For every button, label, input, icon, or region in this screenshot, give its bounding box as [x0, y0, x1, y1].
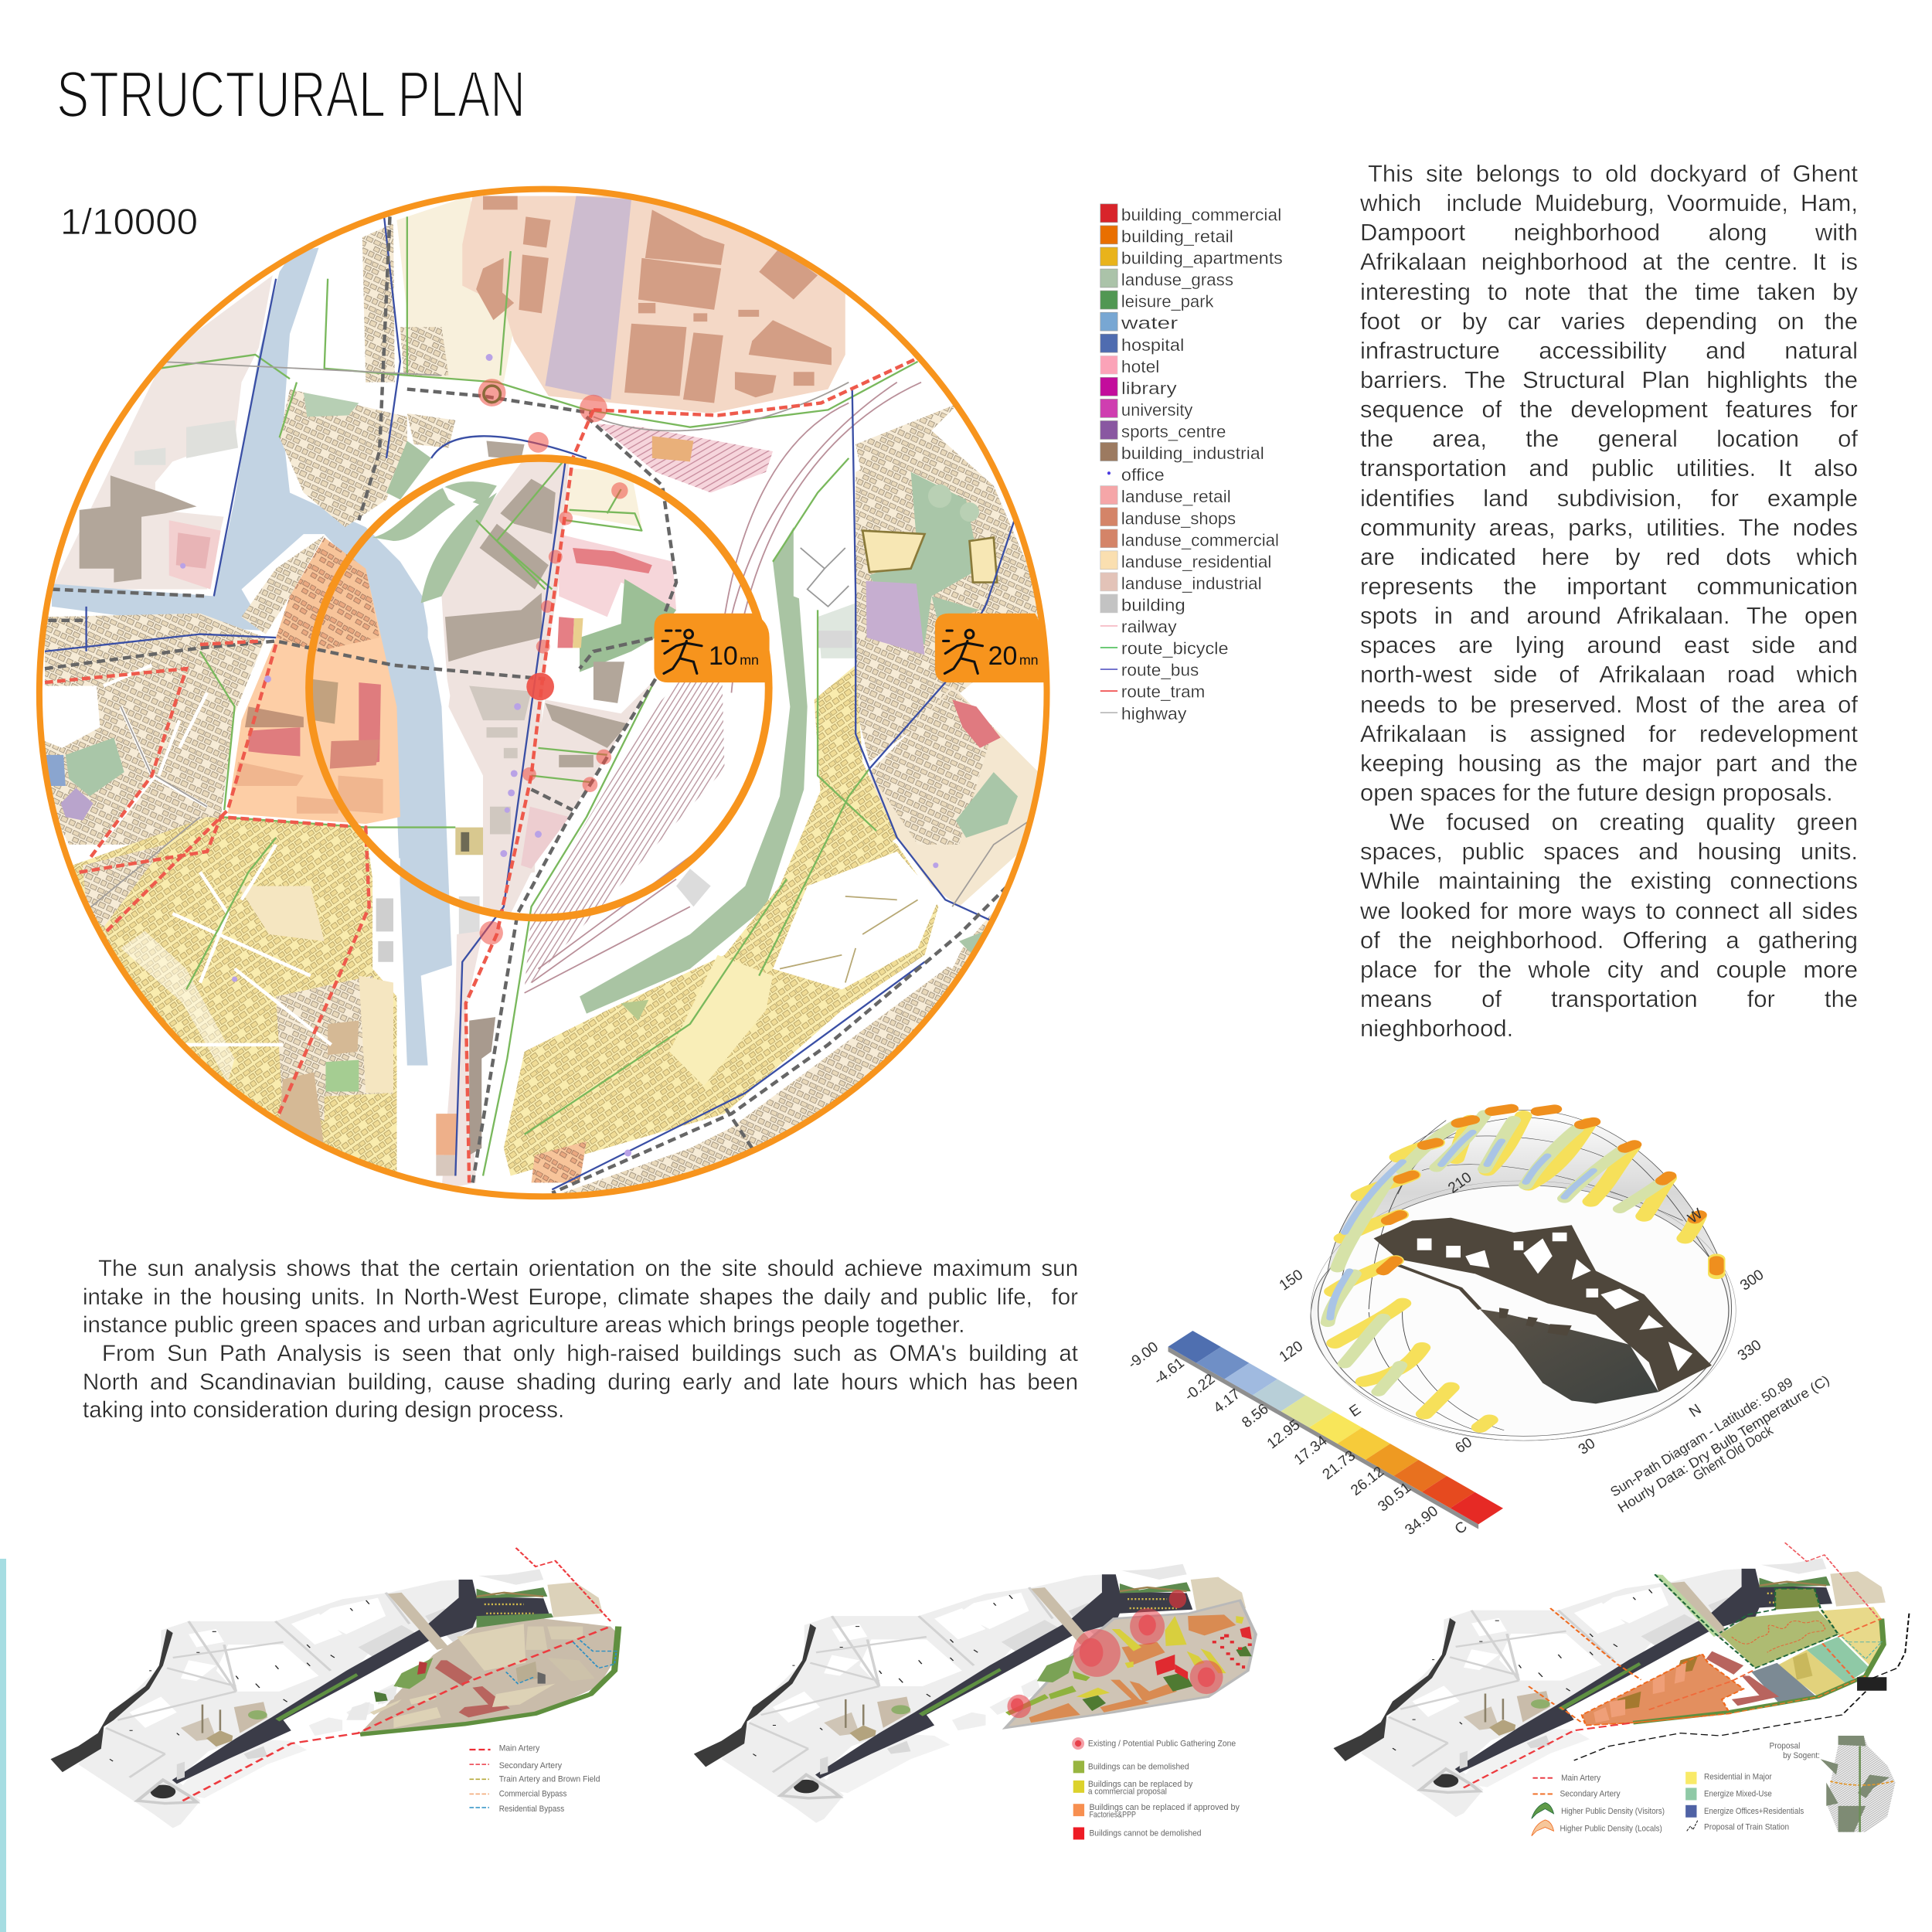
proposed train line	[1574, 1614, 1909, 1760]
legend: proposal	[1532, 1741, 1820, 1836]
map: thin route network	[45, 206, 1035, 1189]
chart caption: Ghent Old Dock	[1690, 1422, 1776, 1484]
legend: map layers: building_industrial	[1121, 444, 1264, 463]
text block: site description: Afrikalaan is assigned for redevelopment	[1360, 720, 1858, 747]
badge: 20 minutes: 20	[988, 641, 1017, 671]
legend: map layers: landuse_residential	[1121, 552, 1271, 571]
mixed-use land	[1807, 1637, 1869, 1684]
legend: proposal: Proposal of Train Station	[1704, 1823, 1789, 1832]
colour scale labels: 30.51	[1375, 1480, 1414, 1515]
text block: site description: We focused on creating quality green	[1389, 808, 1858, 835]
legend: proposal: Energize Offices+Residentials	[1704, 1807, 1804, 1816]
text block: site description: transportation and public utilities. It also	[1360, 454, 1858, 481]
chart: compass labels: 60	[1452, 1434, 1475, 1457]
text block: site description: This site belongs to old dockyard of Ghent	[1368, 160, 1858, 187]
text block: site description: place for the whole city and couple more	[1360, 956, 1858, 983]
map: 20 minute ring	[39, 189, 1047, 1196]
text block: sun analysis: North and Scandinavian building, cause shading during early and late hours which has been	[83, 1369, 1078, 1395]
text block: site description: community areas, parks, utilities. The nodes	[1360, 514, 1858, 541]
legend: map layers: landuse_grass	[1121, 270, 1233, 290]
map: office dots	[180, 354, 938, 1156]
legend: map layers: university	[1121, 400, 1193, 420]
legend: proposal: Proposal	[1770, 1741, 1800, 1750]
map: red communication nodes	[478, 379, 628, 944]
text block: site description: spaces are lying around east side and	[1360, 631, 1858, 658]
left edge strip	[0, 1559, 6, 1932]
text block: site description: the area, the general location of	[1360, 425, 1858, 452]
green site edge	[360, 1627, 618, 1734]
colour scale labels: 26.12	[1348, 1464, 1387, 1499]
text block: site description: are indicated here by red dots which	[1360, 543, 1858, 570]
map: canal water	[52, 248, 452, 1079]
chart caption: Hourly Data: Dry Bulb Temperature (C)	[1615, 1372, 1832, 1515]
legend: map layers	[1100, 204, 1283, 723]
map: 10 minute ring	[309, 458, 769, 918]
badge: 10 minutes: mn	[740, 652, 759, 668]
text block: site description: of the neighborhood. Offering a gathering	[1360, 927, 1858, 954]
colour scale labels: 34.90	[1402, 1503, 1441, 1539]
badge: 20 minutes	[935, 614, 1049, 682]
text block: site description: needs to be preserved. Most of the area of	[1360, 691, 1858, 718]
residential land, east	[1821, 1607, 1883, 1665]
chart: compass labels	[1277, 1169, 1767, 1458]
legend: proposal: by Sogent:	[1783, 1751, 1820, 1760]
text block: site description: interesting to note that the time taken by	[1360, 278, 1858, 305]
proposed train station	[1857, 1677, 1886, 1691]
offices land	[1751, 1663, 1817, 1703]
icon: running figure	[662, 630, 702, 673]
park	[1037, 1655, 1074, 1682]
legend: building policy: a commercial proposal	[1088, 1787, 1167, 1796]
text block: site description: identifies land subdivision, for example	[1360, 485, 1858, 512]
legend: building policy: Buildings cannot be demolished	[1089, 1829, 1202, 1838]
map: rail yard	[525, 383, 921, 993]
legend: proposal: Higher Public Density (Visitors)	[1561, 1807, 1665, 1816]
legend: map layers: building_retail	[1121, 226, 1233, 246]
text block: site description: While maintaining the existing connections	[1360, 867, 1858, 894]
orange replaceable buildings	[1029, 1614, 1236, 1723]
sun path analemma bands	[1328, 1108, 1716, 1427]
map: west orange commercial zone	[228, 538, 400, 824]
icon: running figure	[944, 630, 982, 673]
text block: site description: which include Muideburg, Voormuide, Ham,	[1360, 189, 1858, 216]
legend: map layers: office	[1121, 465, 1165, 485]
scale label: 1/10000	[60, 201, 198, 242]
legend: building policy: Buildings can be demolished	[1088, 1763, 1189, 1772]
panel: axonometric plan 3, development proposal	[1334, 1543, 1909, 1832]
chart: compass labels: 330	[1735, 1337, 1764, 1364]
legend: map layers: water	[1121, 314, 1179, 333]
badge: 10 minutes: 10	[709, 641, 738, 671]
map: central site land	[372, 441, 676, 944]
legend: map layers: building_commercial	[1121, 205, 1281, 224]
text block: site description: nieghborhood.	[1360, 1015, 1513, 1042]
chart: compass labels: 150	[1277, 1267, 1306, 1294]
site land	[1005, 1600, 1256, 1728]
colour scale labels	[1125, 1339, 1471, 1539]
legend: map layers: building	[1121, 596, 1185, 615]
map: north-east quarter	[855, 403, 1042, 906]
site footprint: north mass	[1374, 1218, 1712, 1392]
colour scale labels: C	[1452, 1519, 1471, 1538]
green demolishable buildings	[1005, 1671, 1090, 1716]
text block: sun analysis: taking into consideration during design process.	[83, 1397, 564, 1423]
legend: map layers: highway	[1121, 704, 1187, 723]
locals zone	[1582, 1654, 1743, 1726]
chart: temperature colour scale	[1125, 1331, 1503, 1539]
map: grey walking route	[45, 216, 1008, 1193]
legend: map layers: sports_centre	[1121, 422, 1226, 441]
colour scale labels: 21.73	[1320, 1447, 1359, 1483]
legend: map layers: route_bicycle	[1121, 639, 1229, 658]
colour scale labels: 4.17	[1211, 1386, 1243, 1417]
text block: site description: Dampoort neighborhood along with	[1360, 219, 1858, 246]
legend: building policy	[1072, 1737, 1240, 1839]
title: STRUCTURAL PLAN	[56, 58, 526, 131]
inset: Sogent proposal	[1821, 1736, 1896, 1832]
panel: circular structural plan map	[36, 185, 1050, 1199]
chart: compass labels: W	[1685, 1206, 1706, 1227]
text block: site description: spaces, public spaces and housing units.	[1360, 838, 1858, 865]
chart caption: Sun-Path Diagram - Latitude: 50.89	[1607, 1374, 1795, 1500]
text block: site description	[1360, 160, 1858, 1042]
text block: sun analysis	[83, 1256, 1078, 1423]
text block: sun analysis: instance public green spaces and urban agriculture areas which brings people together.	[83, 1312, 964, 1338]
legend: arteries: Main Artery	[499, 1744, 540, 1753]
legend: building policy: Existing / Potential Public Gathering Zone	[1088, 1739, 1236, 1748]
legend: building policy: Factories&PPP	[1089, 1811, 1136, 1820]
legend: arteries: Secondary Artery	[499, 1761, 562, 1770]
legend: proposal: Secondary Artery	[1560, 1790, 1621, 1799]
legend: map layers: railway	[1121, 617, 1178, 637]
green site edge	[1633, 1618, 1883, 1723]
colour scale labels: -4.61	[1151, 1355, 1188, 1389]
site buildings	[370, 1624, 595, 1728]
chart: compass labels: N	[1686, 1401, 1705, 1420]
chart: compass labels: E	[1347, 1402, 1364, 1420]
chart: compass labels: 120	[1277, 1338, 1306, 1366]
yellow replaceable buildings	[1077, 1616, 1244, 1698]
residential land, middle	[1777, 1650, 1846, 1696]
legend: arteries: Commercial Bypass	[499, 1790, 567, 1799]
legend: map layers: leisure_park	[1121, 292, 1214, 311]
map: south-east yellow residential	[504, 665, 1021, 1196]
legend: proposal: Main Artery	[1561, 1774, 1601, 1783]
panel: axonometric plan 1, street arteries	[51, 1548, 618, 1828]
gathering zones	[1007, 1590, 1223, 1718]
site footprint: south mass	[1480, 1309, 1658, 1403]
legend: map layers: landuse_retail	[1121, 487, 1231, 506]
legend: building policy: Buildings can be replaced if approved by	[1089, 1803, 1240, 1812]
legend: map layers: route_bus	[1121, 661, 1199, 680]
legend: map layers: landuse_shops	[1121, 509, 1236, 528]
text block: site description: open spaces for the future design proposals.	[1360, 779, 1833, 806]
map: red node route	[45, 358, 918, 1182]
text block: site description: we looked for more ways to connect all sides	[1360, 897, 1858, 924]
badge: 20 minutes: mn	[1019, 652, 1039, 668]
artery dashes	[182, 1548, 617, 1801]
colour scale labels: -9.00	[1125, 1339, 1162, 1372]
colour scale labels: 17.34	[1291, 1433, 1331, 1468]
site land	[360, 1618, 618, 1733]
legend: map layers: hotel	[1121, 357, 1159, 376]
red protected buildings	[1155, 1627, 1252, 1680]
panel: axonometric plan 2, building policy	[694, 1564, 1256, 1823]
park strip	[393, 1658, 433, 1689]
map: northern residential and commercial land	[362, 196, 845, 493]
map: west residential districts	[45, 614, 396, 1175]
chart: compass labels: 30	[1576, 1435, 1598, 1458]
legend: map layers: landuse_industrial	[1121, 573, 1262, 593]
text block: site description: spots in and around Afrikalaan. The open	[1360, 602, 1858, 629]
legend: arteries	[469, 1744, 600, 1814]
colour scale labels: 12.95	[1264, 1417, 1303, 1452]
existing red buildings	[1706, 1651, 1779, 1706]
sun path dome	[1311, 1110, 1732, 1440]
legend: map layers: landuse_commercial	[1121, 530, 1279, 549]
badge: 10 minutes	[654, 614, 770, 682]
green visitors zone	[1720, 1611, 1840, 1668]
dashed boundaries	[1464, 1543, 1882, 1787]
legend: proposal: Residential in Major	[1704, 1772, 1772, 1781]
text block: site description: Afrikalaan neighborhood at the centre. It is	[1360, 248, 1858, 275]
legend: map layers: library	[1121, 379, 1178, 398]
sun path floor	[1318, 1185, 1729, 1436]
colour scale labels: -0.22	[1182, 1371, 1218, 1404]
legend: map layers: hospital	[1121, 335, 1184, 355]
text block: site description: barriers. The Structural Plan highlights the	[1360, 366, 1858, 393]
text block: site description: represents the important communication	[1360, 573, 1858, 600]
chart: sun path diagram	[1311, 1108, 1736, 1440]
legend: proposal: Higher Public Density (Locals)	[1560, 1824, 1662, 1833]
chart: compass labels: 300	[1737, 1267, 1767, 1294]
text block: sun analysis: From Sun Path Analysis is seen that only high-raised buildings such as OMA's building at	[102, 1341, 1078, 1366]
legend: arteries: Train Artery and Brown Field	[499, 1775, 600, 1784]
text block: site description: sequence of the development features for	[1360, 396, 1858, 423]
legend: proposal: Energize Mixed-Use	[1704, 1790, 1772, 1799]
legend: building policy: Buildings can be replaced by	[1088, 1780, 1193, 1789]
legend: arteries: Residential Bypass	[499, 1804, 565, 1814]
text block: site description: keeping housing as the major part and the	[1360, 750, 1858, 777]
map: canal-side south strip	[372, 852, 495, 1189]
colour scale labels: 8.56	[1239, 1401, 1272, 1431]
text block: sun analysis: The sun analysis shows that the certain orientation on the site should achieve maximum sun	[98, 1256, 1078, 1281]
text block: site description: infrastructure accessibility and natural	[1360, 337, 1858, 364]
text block: site description: means of transportation for the	[1360, 985, 1858, 1012]
text block: sun analysis: intake in the housing units. In North-West Europe, climate shapes the daily and public life, for	[83, 1284, 1078, 1310]
map: north-west industrial land	[42, 275, 273, 610]
text block: site description: north-west side of Afrikalaan road which	[1360, 661, 1858, 688]
legend: map layers: building_apartments	[1121, 249, 1283, 268]
legend: map layers: route_tram	[1121, 682, 1205, 702]
chart: compass labels: 210	[1445, 1169, 1475, 1197]
text block: site description: foot or by car varies depending on the	[1360, 308, 1858, 335]
map: east green belt	[580, 527, 855, 1014]
map: north neighbourhood block	[242, 389, 455, 634]
